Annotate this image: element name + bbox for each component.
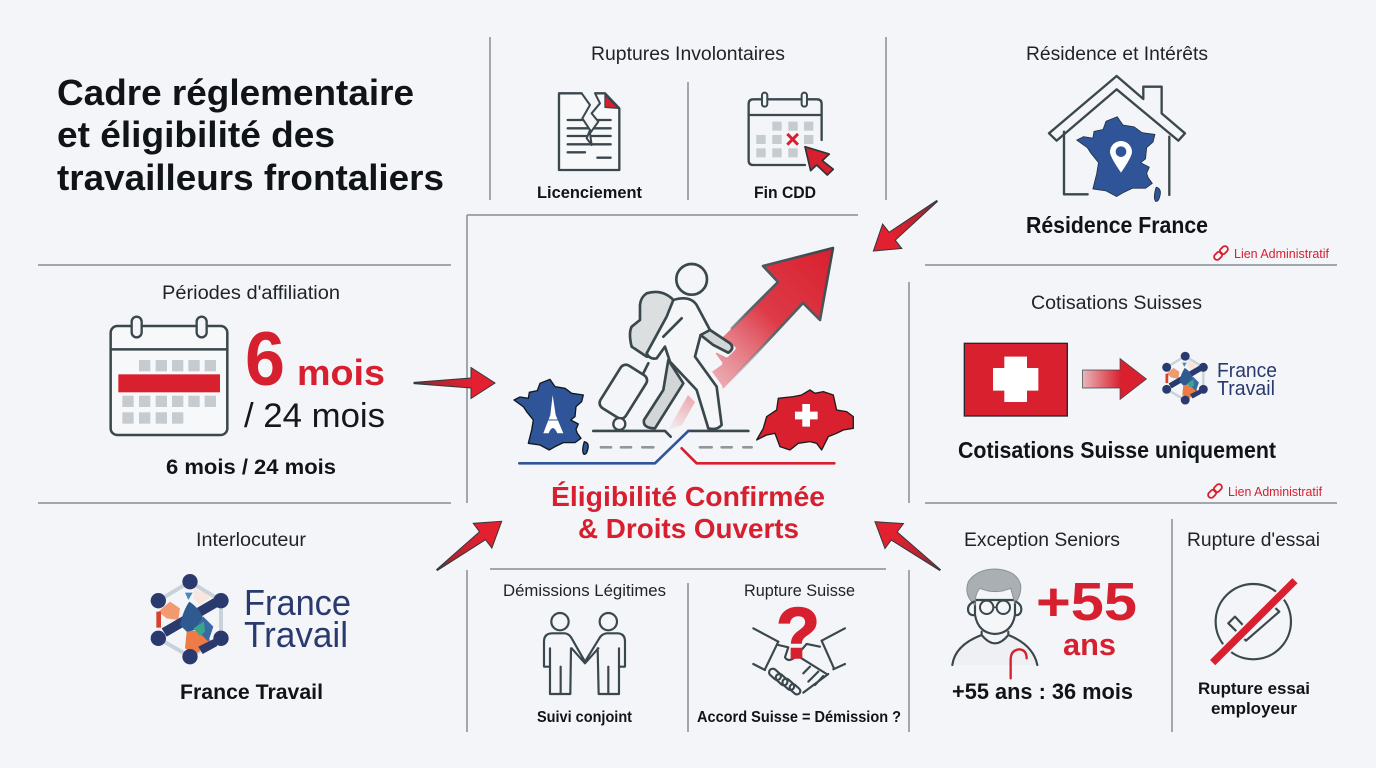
heading: interlocuteur: Interlocuteur (196, 530, 307, 551)
figure: 6 mois: / 24 mois (244, 397, 385, 435)
figure: +55 ans: +55 (1036, 572, 1137, 632)
title: et éligibilité des (57, 114, 335, 155)
figure: +55 ans (1036, 572, 1137, 662)
icon: calendar with cursor (749, 93, 833, 175)
label: rupture essai employeur: employeur (1211, 699, 1297, 718)
panel: périodes d'affiliation (111, 283, 385, 479)
panel: résidence et intérêts (1026, 44, 1330, 261)
headline: éligibilité confirmée (551, 481, 825, 544)
heading: démissions légitimes: Démissions Légitimes (503, 581, 666, 600)
icon: rising arrow (668, 248, 833, 430)
label: rupture essai employeur: Rupture essai (1198, 679, 1310, 698)
label: résidence france: Résidence France (1026, 212, 1208, 238)
icon: border paths (519, 431, 834, 463)
logo: France Travail small: Travail (1217, 378, 1275, 400)
label: suivi conjoint: Suivi conjoint (537, 709, 633, 726)
heading: exception seniors: Exception Seniors (964, 530, 1120, 551)
title (57, 72, 444, 198)
panel: rupture d'essai (1187, 530, 1320, 718)
figure: 6 mois (244, 317, 385, 435)
logo: France Travail small (1162, 352, 1277, 405)
icon: senior with cane (952, 569, 1037, 678)
icon: couple holding hands (544, 613, 625, 694)
arrow: flag to France Travail (1082, 358, 1146, 400)
link: lien administratif: Lien Administratif (1234, 247, 1330, 261)
heading: cotisations suisses: Cotisations Suisses (1031, 293, 1202, 314)
logo: France Travail small: France (1217, 360, 1277, 382)
arrow: affiliation to centre (414, 368, 495, 398)
headline: éligibilité confirmée: Éligibilité Confirmée (551, 481, 825, 512)
map: Switzerland (757, 390, 853, 450)
icon: handshake (753, 628, 845, 696)
heading: ruptures involontaires: Ruptures Involontaires (591, 44, 785, 65)
arrow: seniors to centre (866, 509, 949, 582)
label: accord suisse = démission ?: Accord Suisse = Démission ? (697, 709, 901, 726)
figure: +55 ans: ans (1063, 627, 1116, 662)
arrow: résidence to centre (864, 189, 947, 263)
icon: house with France map (1049, 76, 1185, 202)
logo: France Travail: France (244, 582, 351, 623)
panel: démissions légitimes (503, 581, 666, 726)
heading: rupture suisse: Rupture Suisse (744, 581, 855, 600)
headline: éligibilité confirmée: & Droits Ouverts (578, 513, 799, 544)
panel: interlocuteur (151, 530, 351, 704)
label: rupture essai employeur (1198, 679, 1310, 718)
icon: question mark: ? (776, 594, 820, 674)
panel: cotisations suisses (958, 293, 1323, 499)
label: 6 mois / 24 mois: 6 mois / 24 mois (166, 456, 336, 479)
map: France (514, 379, 588, 454)
centre: éligibilité (514, 248, 853, 544)
panel: ruptures involontaires (537, 44, 833, 202)
title: Cadre réglementaire (57, 72, 414, 113)
icon: crossed-out check (1213, 581, 1295, 663)
panel: rupture suisse (697, 581, 901, 726)
link: lien administratif: Lien Administratif (1228, 485, 1323, 499)
heading: périodes d'affiliation: Périodes d'affiliation (162, 283, 340, 304)
label: licenciement: Licenciement (537, 183, 642, 202)
logo: France Travail (151, 574, 351, 664)
heading: rupture d'essai: Rupture d'essai (1187, 530, 1320, 551)
label: +55 ans : 36 mois: +55 ans : 36 mois (952, 679, 1133, 704)
heading: résidence et intérêts: Résidence et Intérêts (1026, 44, 1208, 65)
figure: 6 mois: mois (297, 352, 385, 393)
illustration: traveller crossing border (514, 248, 853, 463)
icon: torn document (559, 93, 619, 170)
icon: walking person with luggage (597, 264, 733, 430)
logo: France Travail: Travail (244, 614, 348, 655)
arrow: interlocuteur to centre (428, 509, 511, 582)
panel: exception seniors (952, 530, 1137, 704)
icon: calendar (111, 317, 227, 435)
label: fin cdd: Fin CDD (754, 183, 816, 202)
figure: 6 mois: 6 (245, 317, 285, 402)
title: travailleurs frontaliers (57, 157, 444, 198)
icon: Swiss flag (964, 343, 1067, 416)
label: cotisations suisse uniquement: Cotisations Suisse uniquement (958, 437, 1276, 463)
label: France Travail: France Travail (180, 681, 323, 704)
